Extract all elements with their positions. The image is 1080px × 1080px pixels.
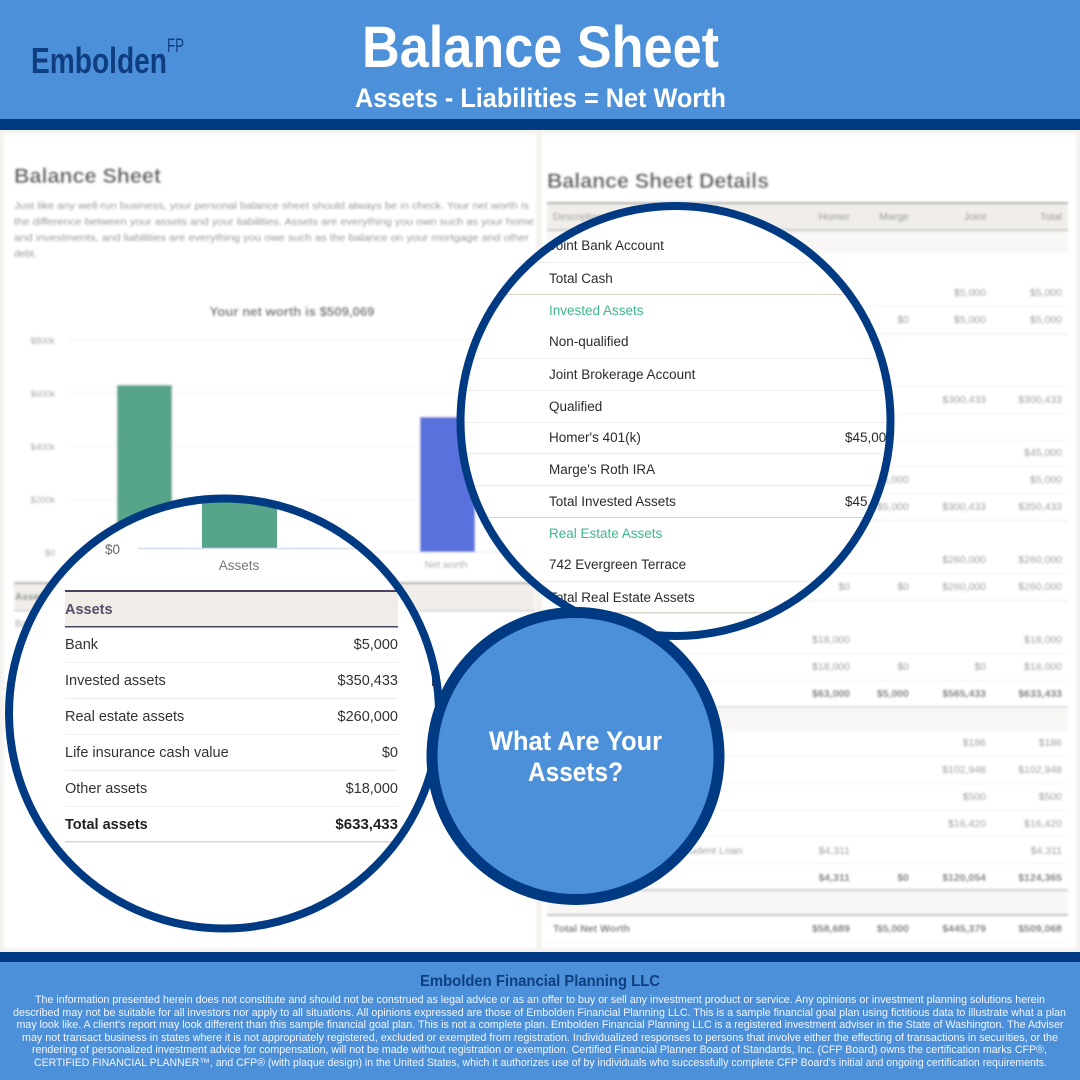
details heading: Balance Sheet Details	[547, 170, 769, 193]
disclaimer text: rendering of personalized investment advice for compensation, will not be made without registration or exemption. Certified Financial Planner Board of Standards, Inc. (CFP Board) owns the certification marks CFP®,	[32, 1044, 1047, 1056]
details table values: $350,433	[1018, 501, 1062, 513]
details table header: Marge	[879, 211, 909, 223]
magnifier: assets summary table	[9, 490, 440, 928]
details table values: $5,000	[954, 287, 986, 299]
magnified row labels: Homer's 401(k)	[549, 430, 641, 445]
details table values: $102,948	[942, 764, 986, 776]
disclaimer text: The information presented herein does not constitute and should not be construed as legal advice or as an offer to buy or sell any investment product or service. Any opinions or investment planning solutions herein	[35, 994, 1045, 1006]
intro paragraph: Just like any well-run business, your personal balance sheet should always be in check. Your net worth is	[14, 201, 529, 212]
bar chart: Net worth	[425, 560, 467, 571]
details table values: $4,311	[819, 845, 850, 857]
magnified assets bar: $0	[105, 542, 120, 557]
details table values: $5,000	[1030, 287, 1062, 299]
details table values: $58,689	[812, 923, 850, 935]
details table values: Total Net Worth	[553, 923, 630, 935]
details table values: $0	[897, 661, 909, 673]
summary table header: Assets	[15, 592, 48, 603]
details table header: Joint	[964, 211, 986, 223]
details table values: $260,000	[1018, 581, 1062, 593]
magnified row labels: Joint Brokerage Account	[549, 367, 696, 382]
magnified row labels: Invested Assets	[549, 303, 644, 318]
magnified row labels: Joint Bank Account	[549, 238, 664, 253]
assets table rows: $18,000	[346, 781, 398, 797]
details table values: Student Loan	[680, 845, 743, 857]
assets table rows	[65, 637, 440, 842]
details table values: $18,000	[812, 661, 850, 673]
magnified row labels: Total Real Estate Assets	[549, 590, 695, 605]
details table values: $0	[897, 581, 909, 593]
details table values: $18,000	[812, 634, 850, 646]
callout: What Are Your Assets: Assets?	[528, 757, 623, 787]
magnified row labels: $45,000	[845, 430, 894, 445]
details table values: $500	[963, 791, 986, 803]
details table values: $102,948	[1018, 764, 1062, 776]
magnified row labels: $45,000	[845, 494, 894, 509]
panel: blurred balance sheet details	[542, 134, 1076, 948]
details table values: $0	[838, 581, 850, 593]
details table values: $260,000	[942, 581, 986, 593]
magnified assets bar: Assets	[219, 558, 260, 573]
details table values: $500	[1039, 791, 1062, 803]
subtitle: Assets - Liabilities = Net Worth	[355, 83, 726, 113]
details table values: $5,000	[877, 923, 909, 935]
magnified assets bar	[105, 502, 356, 570]
details table values: $5,000	[877, 688, 909, 700]
details table header: Description	[553, 212, 603, 223]
magnified row labels: 742 Evergreen Terrace	[549, 557, 686, 572]
details table header: Homer	[818, 211, 850, 223]
panel: blurred balance sheet summary	[4, 134, 536, 948]
callout: What Are Your Assets: What Are Your	[489, 726, 662, 756]
details table values: $445,379	[942, 923, 986, 935]
magnified row labels: Total Cash	[549, 271, 613, 286]
bar chart: $800k	[30, 336, 55, 346]
disclaimer text: described may not be suitable for all investors nor apply to all situations. All opinions expressed are those of Embolden Financial Planning LLC. This is a sample financial goal plan using fictitious data to illustrate what a plan	[13, 1007, 1066, 1019]
details table values: $4,311	[1031, 845, 1062, 857]
assets table rows: $260,000	[338, 709, 398, 725]
details table values: $16,420	[948, 818, 986, 830]
details table header	[547, 202, 1068, 232]
chart title: Your net worth is $509,069	[210, 305, 375, 319]
disclaimer text: may not transact business in states where it is not appropriately registered, excluded or exempted from registration. Individualized responses to persons that involve either the effecting of transactions in securities, or the	[22, 1032, 1058, 1044]
bar chart: $0	[45, 548, 55, 558]
intro paragraph	[14, 201, 534, 260]
footer heading: Embolden Financial Planning LLC	[420, 973, 660, 990]
magnified row labels: Total Invested Assets	[549, 494, 676, 509]
summary table header: Bank	[15, 619, 39, 630]
logo: Embolden	[31, 40, 167, 81]
details table values: $18,000	[1024, 661, 1062, 673]
assets table rows: Invested assets	[65, 673, 166, 689]
panel heading: Balance Sheet	[14, 165, 161, 188]
details table values: $186	[1039, 737, 1062, 749]
assets table header: Assets	[65, 602, 113, 618]
assets table rows: $5,000	[354, 637, 398, 653]
magnified row labels: Non-qualified	[549, 334, 629, 349]
assets table rows: Bank	[65, 637, 99, 653]
details table header: Total	[1040, 211, 1062, 223]
magnified row labels: Real Estate Assets	[549, 526, 663, 541]
footer band	[0, 952, 1080, 1080]
magnified row labels: Marge's Roth IRA	[549, 462, 655, 477]
assets table rows: $350,433	[338, 673, 398, 689]
details table values: $509,068	[1018, 923, 1062, 935]
details table values: $5,000	[954, 314, 986, 326]
details table values: $18,000	[1024, 634, 1062, 646]
disclaimer text: CERTIFIED FINANCIAL PLANNER™, and CFP® (with plaque design) in the United States, which it authorizes use of by individuals who successfully complete CFP Board's initial and ongoing certification requirements.	[34, 1057, 1047, 1069]
magnified row lines	[460, 262, 900, 614]
magnified row labels	[549, 238, 894, 605]
details table values: $5,000	[877, 474, 909, 486]
details table values: $260,000	[1018, 554, 1062, 566]
bar chart: $400k	[30, 442, 55, 452]
assets table rows: Life insurance cash value	[65, 745, 229, 761]
details table values: $45,000	[1024, 447, 1062, 459]
details table values: $300,433	[942, 501, 986, 513]
magnified row labels: Qualified	[549, 399, 602, 414]
details table values: $186	[963, 737, 986, 749]
details table values: $120,054	[942, 872, 986, 884]
details section bands	[547, 232, 1068, 915]
details table values: $0	[974, 661, 986, 673]
title: Balance Sheet	[362, 15, 719, 80]
bar chart	[30, 336, 535, 571]
details table values: $63,000	[812, 688, 850, 700]
details table values: $16,420	[1024, 818, 1062, 830]
disclaimer text: may look like. A client's report may look different than this sample financial goal plan. This is not a complete plan. Embolden Financial Planning LLC is a registered investment adviser in the State of Washington. The Adviser	[16, 1019, 1064, 1031]
bar chart: $600k	[30, 389, 55, 399]
summary table header	[14, 582, 535, 630]
details row lines	[547, 306, 1068, 943]
callout: What Are Your Assets	[432, 612, 719, 900]
details table values: $4,311	[818, 872, 850, 884]
assets table header	[65, 590, 398, 628]
bar chart: $200k	[30, 495, 55, 505]
details table values: $260,000	[942, 554, 986, 566]
intro paragraph: debt.	[14, 249, 37, 260]
details table values: $5,000	[1030, 314, 1062, 326]
details table values: $300,433	[942, 394, 986, 406]
assets table rows: $633,433	[335, 816, 398, 833]
assets table rows: Total assets	[65, 817, 148, 833]
header band	[0, 0, 1080, 130]
disclaimer text	[13, 994, 1066, 1069]
intro paragraph: the difference between your assets and your liabilities. Assets are everything you own such as your home	[14, 217, 534, 228]
details table values: $0	[897, 872, 909, 884]
details table values: $633,433	[1018, 688, 1062, 700]
details table values	[553, 287, 1062, 935]
details table values: $565,433	[942, 688, 986, 700]
assets table rows: Other assets	[65, 781, 147, 797]
logo: FP	[167, 36, 184, 57]
details table values: $5,000	[1030, 474, 1062, 486]
assets table rows: $0	[382, 745, 398, 761]
intro paragraph: and investments, and liabilities are everything you owe such as the balance on your mortgage and other	[14, 233, 530, 244]
details table values: $5,000	[877, 501, 909, 513]
details table values: $124,365	[1018, 872, 1062, 884]
details table values: $0	[897, 314, 909, 326]
details table values: $300,433	[1018, 394, 1062, 406]
magnifier: invested assets detail	[460, 206, 900, 636]
assets table rows: Real estate assets	[65, 709, 184, 725]
